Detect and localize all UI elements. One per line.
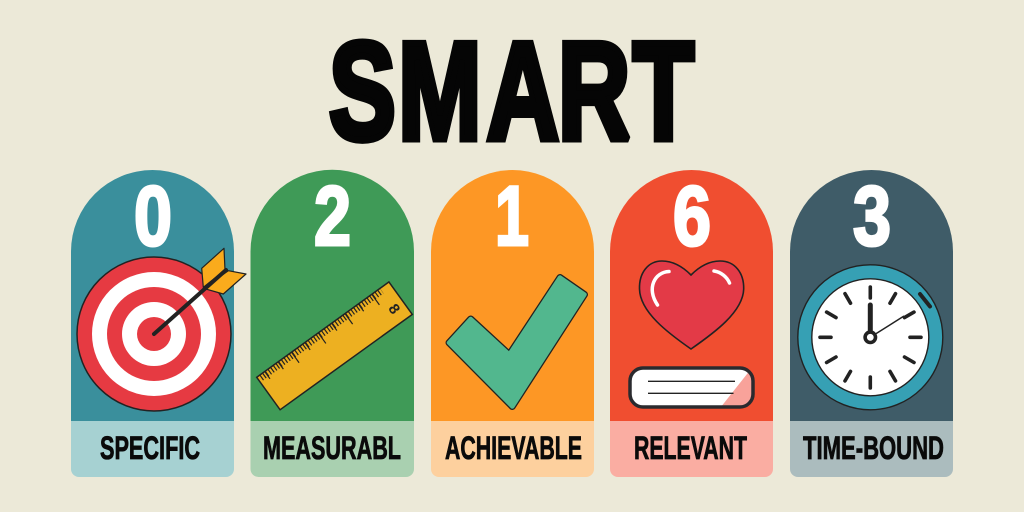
label: MEASURABL: [263, 430, 401, 466]
number: 2: [314, 169, 351, 263]
panel body: [610, 170, 773, 421]
panel: measurable: [250, 169, 414, 477]
panel: achievable: [431, 169, 594, 477]
panel: time-bound: [790, 169, 953, 477]
panel: specific: [71, 169, 246, 477]
panel body: [250, 170, 414, 421]
icon: heart: [639, 261, 744, 349]
label: ACHIEVABLE: [445, 430, 582, 466]
panel body: [790, 170, 953, 421]
label: TIME-BOUND: [803, 430, 944, 466]
panel: relevant: [610, 169, 773, 477]
icon: tag with lines: [630, 368, 753, 407]
label: SPECIFIC: [100, 430, 200, 466]
number: 1: [495, 169, 529, 263]
icon: check mark: [449, 278, 584, 406]
icon: ruler: 8: [384, 301, 403, 318]
panel body: [71, 170, 234, 421]
label band: [431, 421, 594, 477]
icon: target with arrow: [77, 248, 246, 411]
number: 3: [853, 169, 891, 263]
number: 0: [134, 169, 172, 263]
label band: [610, 421, 773, 477]
label band: [790, 421, 953, 477]
label band: [71, 421, 234, 477]
icon: clock: [798, 265, 943, 410]
panel body: [431, 170, 594, 421]
icon: ruler: [257, 282, 412, 410]
label: RELEVANT: [634, 430, 747, 466]
number: 6: [673, 169, 711, 263]
label band: [250, 421, 414, 477]
title: SMART: [329, 13, 694, 169]
